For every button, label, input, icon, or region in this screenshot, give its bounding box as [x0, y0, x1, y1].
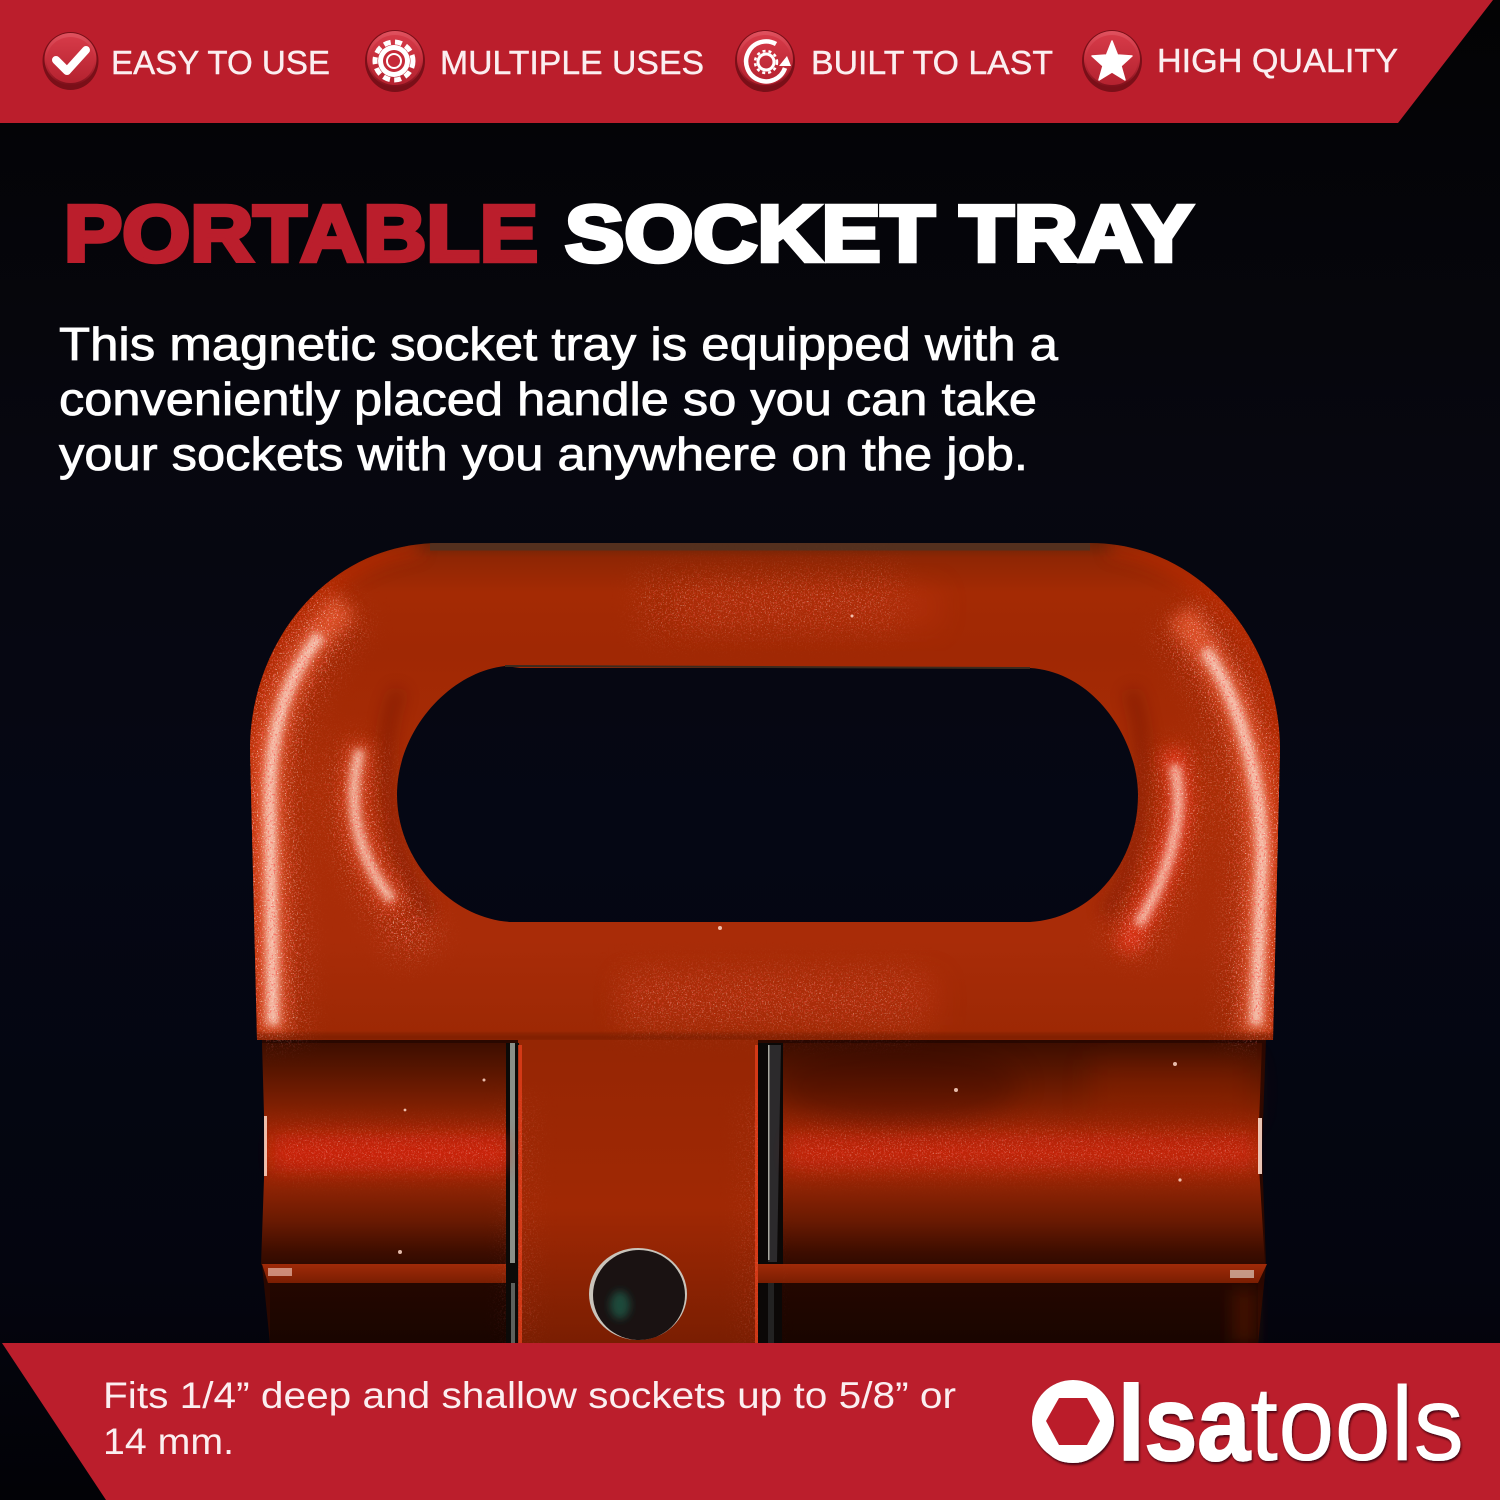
icon: gear button — [365, 30, 425, 92]
feature: multiple uses: MULTIPLE USES — [440, 44, 704, 81]
size note — [103, 1375, 956, 1462]
description text — [59, 318, 1058, 480]
logo: Olsatools: O — [1034, 1360, 1112, 1486]
size note: 14 mm. — [103, 1421, 234, 1462]
icon: gear with arrow button — [735, 30, 795, 92]
feature: built to last — [735, 30, 1053, 92]
feature: multiple uses — [365, 30, 704, 92]
description text: your sockets with you anywhere on the job. — [59, 428, 1028, 480]
surface grain specks — [240, 530, 1290, 1350]
title: PORTABLE — [64, 189, 538, 278]
handle highlights — [250, 545, 1280, 1041]
photo: red magnetic socket tray handle — [240, 530, 1290, 1350]
feature: high quality: HIGH QUALITY — [1157, 42, 1398, 79]
feature: easy to use: EASY TO USE — [111, 44, 330, 81]
top banner — [0, 0, 1493, 123]
feature: built to last: BUILT TO LAST — [811, 44, 1053, 81]
logo: Olsatools: tools — [1250, 1365, 1464, 1483]
tray handle with oval cut-out — [250, 543, 1280, 1040]
logo: Olsatools: lsa — [1118, 1365, 1251, 1483]
icon: check mark button — [42, 32, 98, 90]
screw / rivet — [589, 1248, 687, 1340]
feature: high quality — [1082, 30, 1398, 92]
title: SOCKET TRAY — [565, 189, 1193, 278]
icon: star button — [1082, 30, 1142, 92]
logo: Olsatools — [1032, 1360, 1464, 1486]
bottom banner — [2, 1343, 1500, 1500]
description text: conveniently placed handle so you can take — [59, 373, 1037, 425]
description text: This magnetic socket tray is equipped with a — [59, 318, 1058, 370]
small flecks — [398, 614, 1182, 1254]
tray lower body — [261, 1040, 1267, 1344]
title — [64, 189, 1193, 278]
size note: Fits 1/4” deep and shallow sockets up to 5/8” or — [103, 1375, 956, 1416]
feature: easy to use — [42, 32, 330, 90]
